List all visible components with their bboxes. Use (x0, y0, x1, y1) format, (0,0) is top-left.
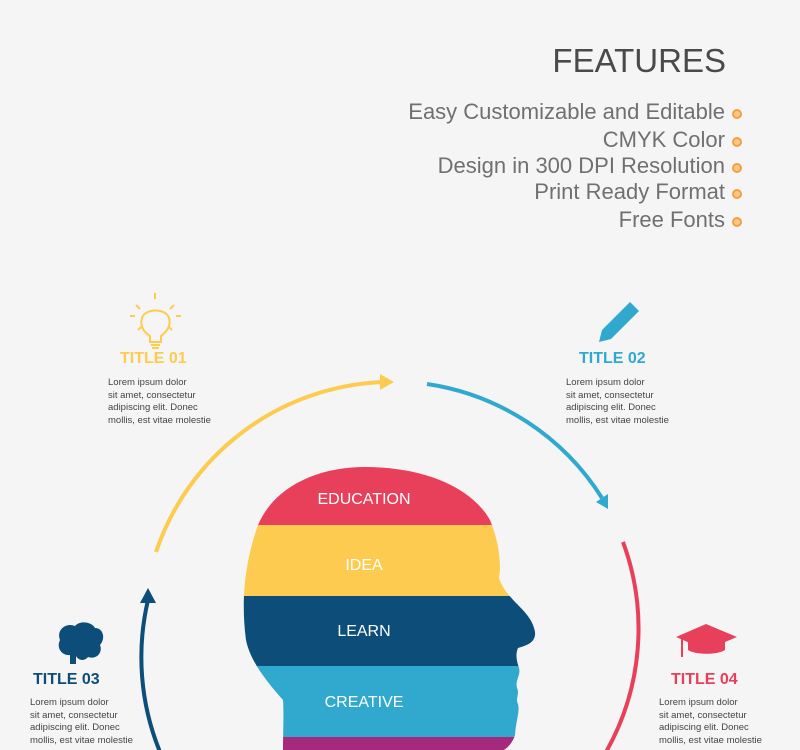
text 03: mollis, est vitae molestie (30, 734, 133, 746)
text 02: mollis, est vitae molestie (566, 414, 669, 426)
features list (408, 99, 742, 232)
title 01: TITLE 01 (120, 350, 187, 367)
text 04: adipiscing elit. Donec (659, 722, 749, 733)
head labels: CREATIVE (325, 694, 403, 711)
title 03: TITLE 03 (33, 671, 100, 688)
title 02 (566, 350, 669, 426)
title 04: TITLE 04 (671, 671, 738, 688)
text 01: sit amet, consectetur (108, 390, 196, 400)
arrow: yellow (156, 374, 394, 552)
head (244, 467, 536, 750)
head labels: LEARN (337, 623, 391, 640)
text 01 (108, 377, 211, 426)
arrow: dark blue (140, 588, 160, 750)
icon: graduation cap (676, 624, 737, 657)
features list: CMYK Color (603, 127, 725, 152)
text 04: sit amet, consectetur (659, 710, 747, 720)
text 03: adipiscing elit. Donec (30, 722, 120, 733)
features list: Free Fonts (619, 207, 725, 232)
text 02: Lorem ipsum dolor (566, 377, 645, 388)
diagram (58, 293, 737, 750)
text 01: Lorem ipsum dolor (108, 377, 187, 388)
icon: pencil (599, 302, 639, 342)
features list: Easy Customizable and Editable (408, 99, 725, 124)
head labels (317, 491, 411, 711)
text 03: Lorem ipsum dolor (30, 697, 109, 708)
title 04 (659, 671, 762, 746)
text 04: mollis, est vitae molestie (659, 734, 762, 746)
icon: light bulb (130, 293, 181, 348)
text 03: sit amet, consectetur (30, 710, 118, 720)
features list: Design in 300 DPI Resolution (438, 153, 725, 178)
text 01: mollis, est vitae molestie (108, 414, 211, 426)
icon: brain (59, 622, 103, 664)
heading: features: FEATURES (552, 42, 726, 79)
text 02 (566, 377, 669, 426)
text 01: adipiscing elit. Donec (108, 402, 198, 413)
arrow: blue (427, 384, 608, 509)
text 04 (659, 697, 762, 746)
title 01 (108, 350, 211, 426)
arrow: red (606, 542, 639, 750)
text 02: sit amet, consectetur (566, 390, 654, 400)
text 02: adipiscing elit. Donec (566, 402, 656, 413)
features list: Print Ready Format (534, 179, 725, 204)
text 03 (30, 697, 133, 746)
title 02: TITLE 02 (579, 350, 646, 367)
head labels: IDEA (345, 557, 383, 574)
text 04: Lorem ipsum dolor (659, 697, 738, 708)
title 03 (30, 671, 133, 746)
head labels: EDUCATION (317, 491, 411, 508)
